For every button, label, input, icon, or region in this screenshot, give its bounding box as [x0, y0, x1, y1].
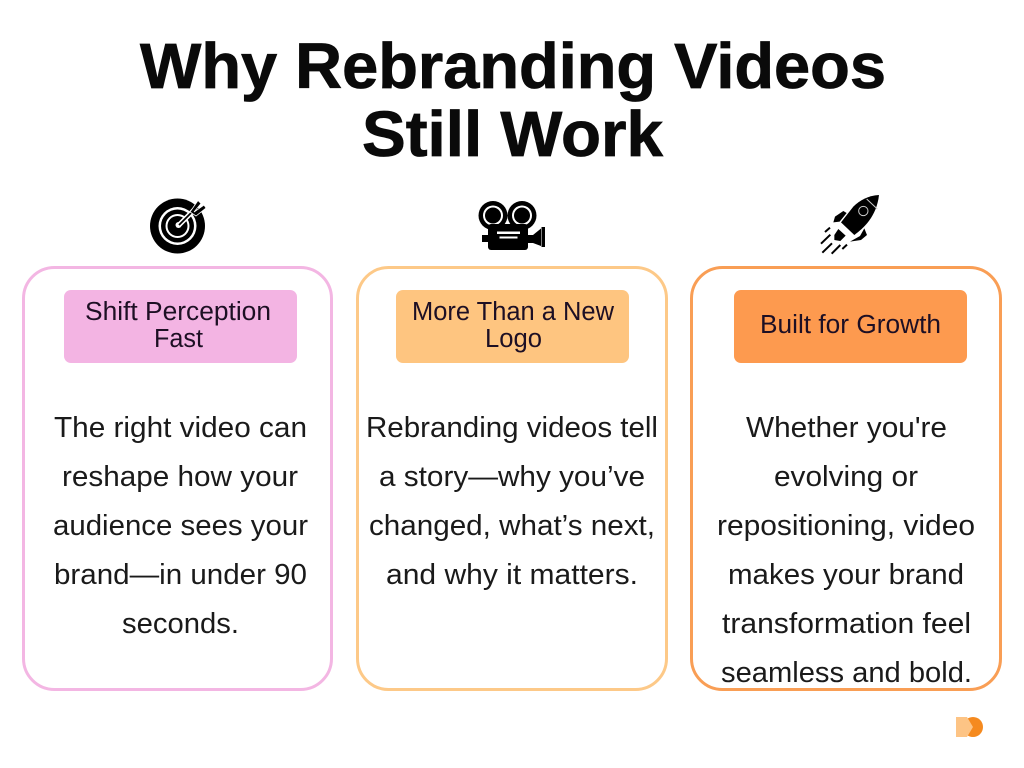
body text: audience sees your: [53, 510, 309, 542]
body text: a story—why you’ve: [379, 461, 645, 493]
panel: shift perception fast: [24, 268, 332, 690]
body text: brand—in under 90: [54, 559, 307, 591]
heading badge: Fast: [154, 325, 203, 353]
title: Still Work: [362, 98, 663, 170]
body text: transformation feel: [722, 608, 971, 640]
title: Why Rebranding Videos: [140, 30, 886, 102]
icon: film camera: [478, 201, 545, 250]
heading badge: [64, 290, 297, 363]
body text: and why it matters.: [386, 559, 638, 591]
heading badge: [396, 290, 629, 363]
body text: [366, 412, 658, 591]
icon: target with arrow: [150, 198, 206, 254]
body text: Whether you're: [746, 412, 947, 444]
icon: rocket: [821, 195, 879, 254]
heading badge: Shift Perception: [85, 298, 271, 326]
heading badge: Built for Growth: [760, 311, 941, 339]
panel: more than a new logo: [358, 268, 666, 690]
title: [140, 30, 886, 170]
body text: reshape how your: [62, 461, 299, 493]
body text: evolving or: [774, 461, 919, 493]
body text: repositioning, video: [717, 510, 975, 542]
body text: seconds.: [122, 608, 239, 640]
body text: Rebranding videos tell: [366, 412, 658, 444]
body text: The right video can: [54, 412, 307, 444]
body text: [53, 412, 309, 640]
panel: built for growth: [692, 268, 1000, 690]
body text: seamless and bold.: [721, 657, 972, 689]
heading badge: Logo: [485, 325, 542, 353]
logo mark: [956, 717, 983, 737]
body text: [717, 412, 975, 689]
body text: makes your brand: [728, 559, 964, 591]
body text: changed, what’s next,: [369, 510, 655, 542]
heading badge: [734, 290, 967, 363]
heading badge: More Than a New: [412, 298, 615, 326]
